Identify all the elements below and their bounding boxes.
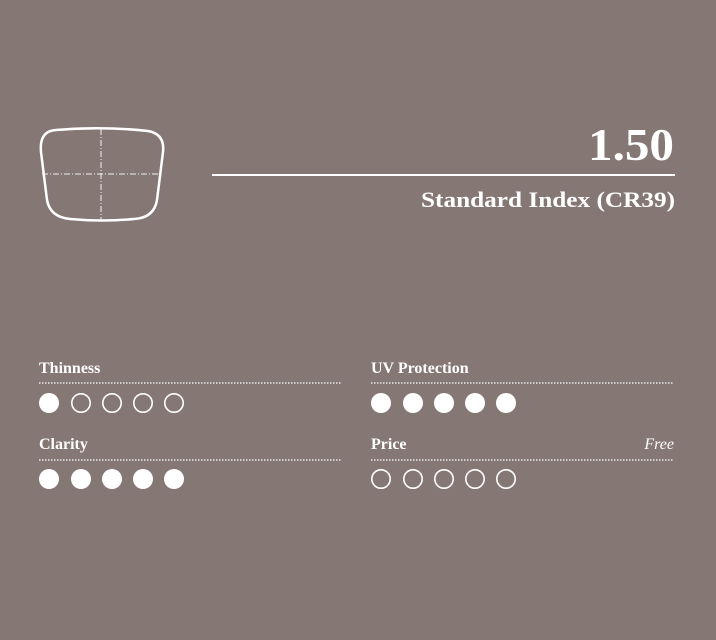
icon: lens outline bbox=[41, 128, 163, 221]
divider line bbox=[212, 174, 675, 176]
rating: thinness bbox=[39, 360, 341, 413]
rating: price: Price bbox=[371, 436, 407, 453]
rating: uv protection bbox=[371, 360, 674, 413]
subtitle: Standard Index (CR39) bbox=[421, 187, 675, 212]
title: index value: 1.50 bbox=[588, 119, 674, 170]
rating: price bbox=[371, 436, 674, 488]
rating: clarity bbox=[39, 436, 341, 489]
rating: thinness: Thinness bbox=[39, 360, 100, 377]
rating: uv protection: UV Protection bbox=[371, 360, 469, 377]
rating: clarity: Clarity bbox=[39, 436, 88, 453]
rating: price: Free bbox=[643, 436, 674, 453]
